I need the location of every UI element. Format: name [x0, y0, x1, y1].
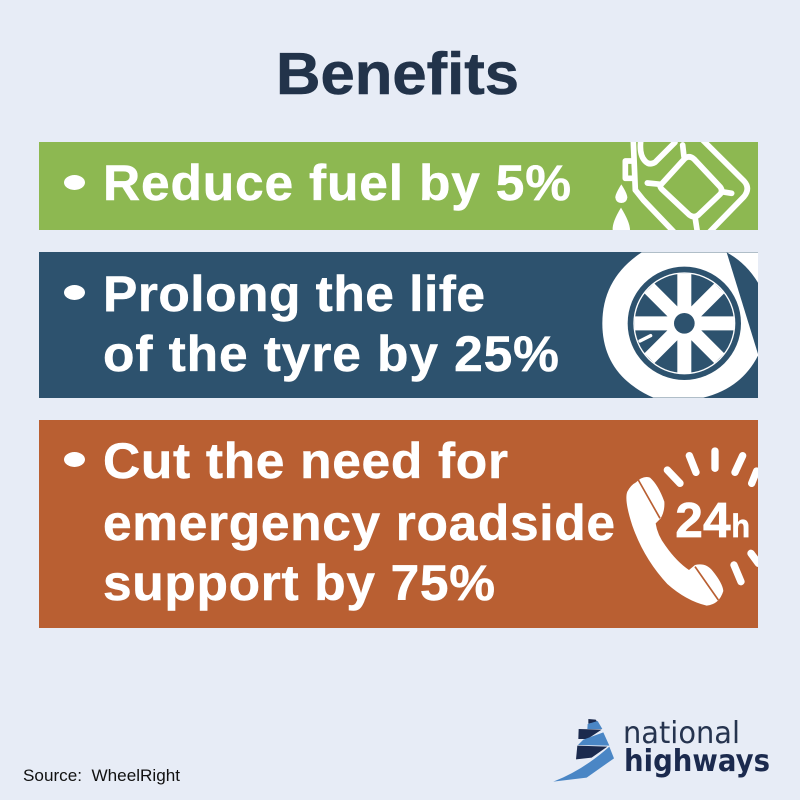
text: cut emergency support: Cut the need for	[103, 433, 508, 489]
logo: national highways	[553, 716, 770, 782]
text: reduce fuel: Reduce fuel by 5%	[103, 155, 571, 211]
panel: cut emergency support	[39, 420, 758, 628]
icon: 24h phone	[626, 451, 758, 606]
text: cut emergency support: support by 75%	[103, 555, 495, 611]
text: cut emergency support	[103, 433, 615, 611]
text: prolong tyre life: of the tyre by 25%	[103, 326, 559, 382]
text: prolong tyre life	[103, 266, 559, 382]
icon: 24h phone: h	[731, 508, 750, 544]
source note: Source: WheelRight	[23, 767, 180, 785]
logo wordmark: national	[623, 716, 740, 751]
panel: prolong tyre life	[39, 252, 758, 398]
text: cut emergency support: emergency roadside	[103, 495, 615, 551]
icon: 24h phone: 24	[675, 493, 731, 548]
logo mark	[553, 719, 614, 782]
icon: fuel can	[613, 139, 747, 238]
title: Benefits	[276, 41, 519, 107]
text: prolong tyre life: Prolong the life	[103, 266, 485, 322]
bullet	[64, 285, 85, 300]
icon: tyre	[602, 252, 758, 398]
bullet	[64, 452, 85, 467]
bullet	[64, 175, 85, 190]
panel: reduce fuel	[39, 142, 758, 230]
logo: national highways: highways	[624, 744, 770, 779]
